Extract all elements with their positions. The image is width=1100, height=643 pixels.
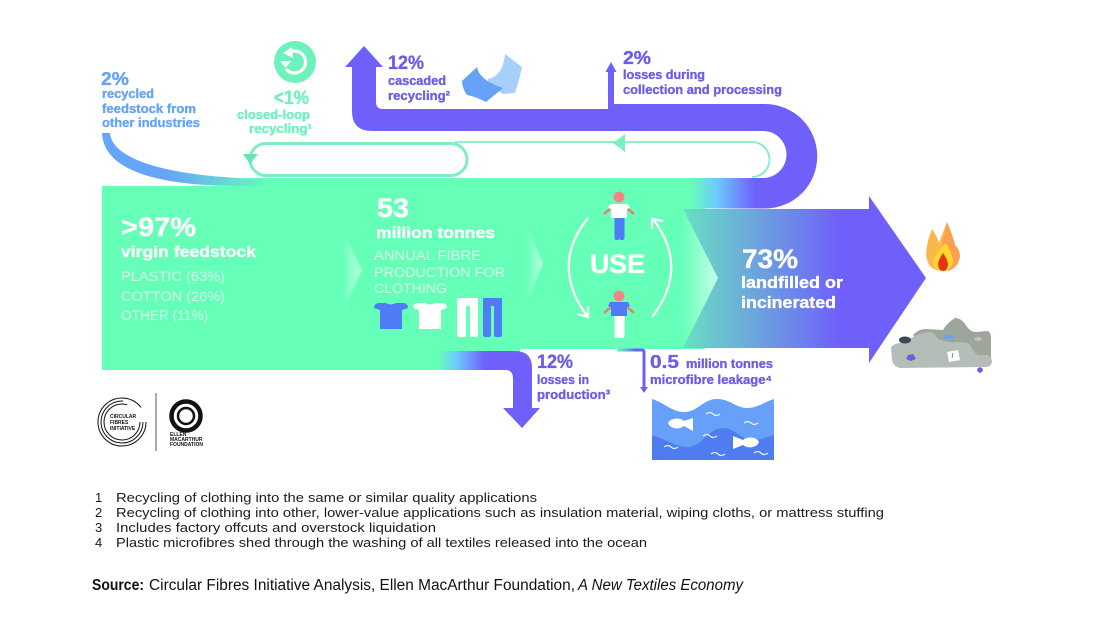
logo: Ellen MacArthur Foundation: ELLEN — [170, 432, 187, 438]
recycled feedstock blue curve — [102, 133, 272, 186]
icon: landfill pile — [891, 318, 992, 373]
label: losses in production: 12% — [537, 352, 573, 373]
icon: fire — [926, 222, 960, 271]
label: annual fibre production — [374, 193, 505, 296]
label: microfibre leakage: million tonnes — [686, 357, 773, 371]
cascaded recycling purple flow with arrowhead — [345, 46, 817, 208]
label: losses in production: losses in — [537, 373, 589, 387]
source line: Source: — [92, 577, 144, 594]
label: closed-loop recycling: <1% — [274, 88, 309, 109]
logo: Circular Fibres Initiative: INITIATIVE — [110, 426, 136, 432]
icon: closed-loop recycling circle — [274, 41, 316, 83]
footnotes: 1 — [95, 490, 102, 505]
icon: fish right — [733, 436, 759, 449]
chevron: production to use — [518, 205, 543, 325]
label: cascaded recycling: cascaded — [388, 74, 446, 88]
logo: Circular Fibres Initiative — [98, 398, 146, 446]
label: recycled feedstock: other industries — [102, 116, 200, 130]
label: annual fibre production: 53 — [377, 193, 409, 223]
label: annual fibre production: CLOTHING — [374, 281, 447, 296]
label: cascaded recycling: recycling² — [388, 89, 450, 103]
label: recycled feedstock: 2% — [101, 69, 129, 89]
label: annual fibre production: PRODUCTION FOR — [374, 265, 505, 280]
label: landfilled or incinerated — [741, 244, 843, 312]
label: microfibre leakage — [650, 352, 773, 387]
label: recycled feedstock: feedstock from — [102, 102, 196, 116]
arrow: cycle left — [569, 218, 588, 317]
use cycle — [569, 192, 671, 338]
icon: closed-loop arrowhead mid — [613, 134, 625, 152]
footnotes: Recycling of clothing into other, lower-value applications such as insulation material, wiping cloths, or mattress stuffing — [116, 505, 884, 520]
logo: Ellen MacArthur Foundation: MACARTHUR — [170, 437, 203, 443]
icon: fabric scraps — [462, 54, 522, 102]
icon: person bottom — [604, 290, 634, 338]
label: closed-loop recycling: closed-loop — [237, 108, 310, 122]
label: losses during collection: losses during — [623, 68, 705, 82]
label: losses during collection — [623, 48, 782, 97]
label: cascaded recycling — [388, 53, 450, 103]
source line: A New Textiles Economy — [577, 577, 744, 594]
label: landfilled or incinerated: 73% — [742, 244, 798, 274]
icon: ocean with fish and microfibres — [652, 399, 774, 460]
label: virgin feedstock: virgin feedstock — [121, 244, 256, 261]
label: recycled feedstock: recycled — [102, 87, 154, 101]
label: virgin feedstock: PLASTIC (63%) — [121, 269, 225, 284]
label: virgin feedstock: OTHER (11%) — [121, 308, 208, 323]
closed-loop recycling outline — [243, 134, 770, 177]
label: microfibre leakage: 0.5 — [650, 352, 679, 372]
label: virgin feedstock: >97% — [121, 212, 196, 242]
label: landfilled or incinerated: incinerated — [741, 293, 836, 312]
label: microfibre leakage: microfibre leakage⁴ — [650, 373, 772, 387]
label: annual fibre production: million tonnes — [376, 225, 495, 242]
chevron: use to disposal — [640, 209, 718, 348]
icon: person top — [604, 192, 634, 240]
label: cascaded recycling: 12% — [388, 53, 424, 74]
icon: clothing row — [374, 298, 502, 337]
label: closed-loop recycling: recycling¹ — [249, 122, 312, 136]
source line — [92, 577, 744, 594]
label: virgin feedstock — [121, 212, 256, 323]
footnotes — [95, 490, 884, 550]
arrow: microfibre leakage — [617, 348, 648, 393]
microfibre squiggles — [664, 412, 768, 456]
source line: Circular Fibres Initiative Analysis, Ellen MacArthur Foundation, — [149, 577, 575, 594]
label: USE: USE — [590, 249, 645, 279]
main purple arrow: landfilled or incinerated — [675, 196, 926, 363]
label: losses during collection: collection and processing — [623, 83, 782, 97]
arrow: cycle right — [652, 219, 671, 317]
label: annual fibre production: ANNUAL FIBRE — [374, 248, 481, 263]
footnotes: Recycling of clothing into the same or similar quality applications — [116, 490, 538, 505]
footnotes: 3 — [95, 520, 102, 535]
label: losses in production: production³ — [537, 388, 610, 402]
icon: fish left — [668, 418, 693, 431]
logo: Ellen MacArthur Foundation: FOUNDATION — [170, 442, 203, 448]
logo: Ellen MacArthur Foundation — [170, 402, 203, 448]
arrow: losses in production — [438, 351, 540, 428]
footnotes: Plastic microfibres shed through the washing of all textiles released into the ocean — [116, 535, 647, 550]
footnotes: 2 — [95, 505, 102, 520]
footnotes: Includes factory offcuts and overstock liquidation — [116, 520, 436, 535]
logo: Circular Fibres Initiative: FIBRES — [110, 420, 129, 426]
label: losses in production — [537, 352, 610, 402]
label: virgin feedstock: COTTON (26%) — [121, 289, 225, 304]
label: losses during collection: 2% — [623, 48, 651, 68]
logo: Circular Fibres Initiative: CIRCULAR — [110, 414, 136, 420]
arrow: losses during collection — [606, 62, 616, 106]
chevron: feedstock to production — [330, 205, 362, 340]
label: recycled feedstock — [101, 69, 200, 130]
label: closed-loop recycling — [237, 88, 312, 136]
footnotes: 4 — [95, 535, 102, 550]
icon: closed-loop arrowhead left — [243, 154, 258, 164]
logo divider — [156, 393, 157, 451]
mint feedstock and production flow — [102, 178, 705, 370]
label: landfilled or incinerated: landfilled or — [741, 273, 843, 292]
